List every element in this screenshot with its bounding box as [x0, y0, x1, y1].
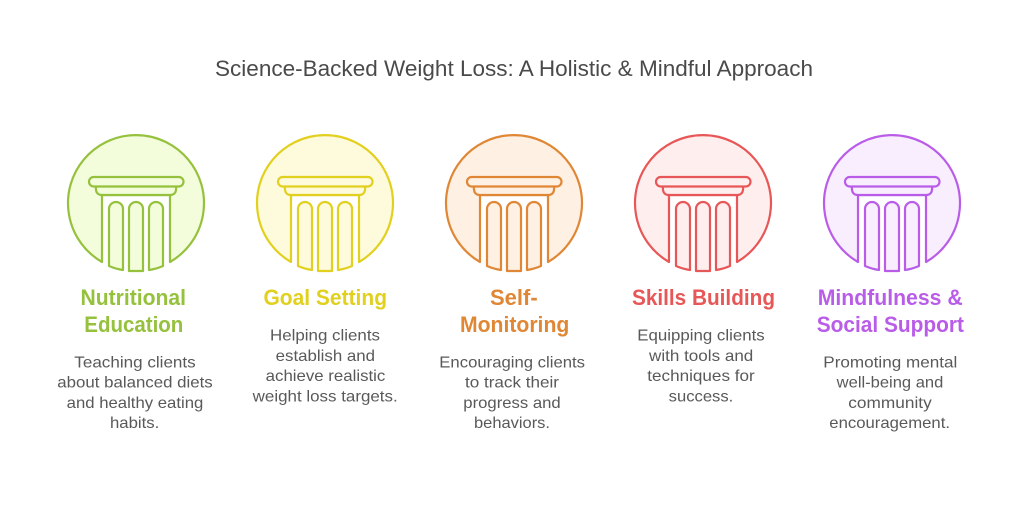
description — [57, 354, 213, 432]
panel: Self-Monitoring — [439, 135, 585, 432]
description: progress and — [463, 395, 561, 412]
description: to track their — [465, 374, 560, 392]
description: Equipping clients — [637, 328, 765, 344]
description: Promoting mental — [823, 354, 957, 372]
panel: Skills Building — [632, 135, 775, 405]
heading: Self- — [490, 285, 538, 310]
description — [439, 354, 585, 432]
panel: Mindfulness & Social Support — [817, 135, 965, 432]
description: weight loss targets. — [252, 388, 398, 406]
heading: Education — [84, 312, 183, 337]
description: Helping clients — [270, 328, 380, 344]
description: and healthy eating — [67, 395, 203, 412]
description: techniques for — [647, 368, 755, 385]
heading: Social Support — [817, 312, 965, 337]
heading: Monitoring — [460, 312, 569, 337]
panel: Goal Setting — [252, 135, 398, 405]
description: behaviors. — [474, 415, 550, 432]
heading — [460, 285, 569, 337]
heading — [80, 285, 186, 337]
description: about balanced diets — [57, 374, 213, 392]
description — [823, 354, 957, 432]
heading: Goal Setting — [264, 285, 387, 310]
icon: pillar in circle — [68, 135, 204, 271]
heading: Nutritional — [80, 285, 186, 310]
description: Encouraging clients — [439, 354, 585, 372]
heading: Skills Building — [632, 285, 775, 310]
description: success. — [669, 388, 733, 406]
description — [252, 328, 398, 406]
description: well-being and — [836, 374, 943, 392]
description: achieve realistic — [266, 368, 385, 385]
panel: Nutritional Education — [57, 135, 213, 432]
description: with tools and — [648, 348, 753, 365]
description: community — [848, 395, 932, 412]
icon: pillar in circle — [635, 135, 771, 271]
heading — [817, 285, 965, 337]
description: encouragement. — [829, 415, 950, 432]
description: establish and — [276, 348, 375, 365]
description: Teaching clients — [74, 354, 196, 372]
icon: pillar in circle — [446, 135, 582, 271]
icon: pillar in circle — [257, 135, 393, 271]
heading: Mindfulness & — [818, 285, 963, 310]
description — [637, 328, 765, 406]
description: habits. — [110, 415, 159, 432]
icon: pillar in circle — [824, 135, 960, 271]
title: Science-Backed Weight Loss: A Holistic & Mindful Approach — [215, 56, 813, 81]
